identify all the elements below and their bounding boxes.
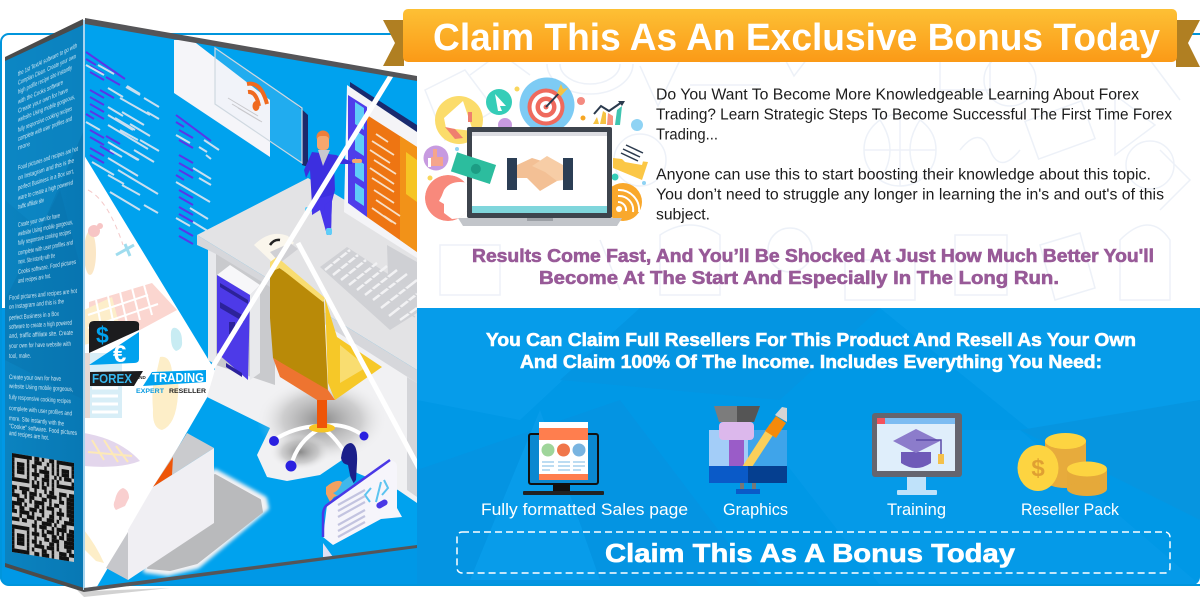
chair [269, 257, 382, 472]
illustration: marketing laptop with handshake [424, 78, 648, 226]
icon: purple dot [498, 118, 512, 132]
desk left leg [208, 250, 216, 365]
icon: thumbs up [424, 146, 448, 170]
dress [333, 476, 357, 499]
intro text: You don’t need to struggle any longer in learning the in's and out's of this [656, 186, 1164, 204]
purple statement: Results Come Fast, And You’ll Be Shocked At Just How Much Better You'll [472, 246, 1154, 266]
X strokes [212, 74, 420, 470]
monitor [344, 82, 417, 293]
logo wordmark: FOREX [92, 372, 133, 386]
logo wordmark: AND [136, 375, 146, 380]
back panel with wifi [174, 40, 308, 167]
side panel text: with the Cooks software [17, 79, 63, 106]
box floor shadow [146, 472, 266, 573]
intro text: subject. [656, 206, 710, 224]
icon: wifi circle [604, 183, 642, 221]
ribbon left tail [383, 20, 404, 66]
ribbon right tail [1176, 20, 1200, 67]
item: reseller pack [1018, 433, 1119, 519]
chair shadow [259, 386, 375, 454]
side panel text: on Instagram and this is the [9, 298, 64, 311]
icon: monitor with graduation cap [872, 413, 962, 495]
box edges [83, 18, 417, 592]
dashed frame [457, 532, 1170, 573]
pink grid [89, 283, 177, 331]
side panel text: software to create a high powered [9, 320, 72, 331]
icon: target [520, 78, 574, 132]
label: Reseller Pack [1021, 500, 1119, 519]
icon: pink dot [577, 97, 585, 105]
code lines [86, 52, 219, 244]
character: man [304, 130, 362, 235]
intro text: Anyone can use this to start boosting their knowledge about this topic. [656, 166, 1151, 184]
label: Graphics [723, 500, 788, 519]
side panel text: and, traffic affiliate site. Create [9, 330, 73, 340]
side panel text: Cooks software. Food pictures [18, 259, 76, 276]
computer tower [217, 265, 260, 295]
side panel text: complete with user profiles and [18, 239, 73, 257]
side panel text: perfect Business in a Box [9, 311, 60, 322]
white box on floor [106, 433, 266, 580]
icon: cursor [486, 89, 512, 115]
call to action [457, 532, 1170, 573]
laptop [458, 127, 622, 226]
keyboard [320, 247, 417, 330]
yellow shape [84, 530, 104, 563]
side panel text: website Using mobile gorgeous, [17, 94, 75, 124]
side panel text [8, 42, 78, 442]
icon: envelope [613, 143, 648, 180]
ribbon main band [403, 9, 1177, 62]
panel: blue lower section [0, 308, 1200, 585]
title: Claim This As An Exclusive Bonus Today [433, 17, 1160, 59]
logo wordmark [90, 370, 206, 395]
box shadow [74, 587, 170, 597]
icon: megaphone [435, 96, 483, 144]
side panel text: fully responsive cooking recipes [18, 229, 71, 247]
logo: forex and trading [89, 321, 206, 395]
purple leaf [84, 433, 140, 467]
speech bubble [323, 460, 402, 545]
icon: small dot [642, 181, 646, 185]
side panel text: Create your own for have [18, 87, 68, 115]
side panel text: complete with user profiles and [9, 405, 72, 418]
side panel text: the 1st TextAI software to go with [18, 42, 77, 78]
icon: dots [428, 147, 459, 180]
icon: blue dot [631, 119, 643, 131]
icon: yellow dot [514, 86, 520, 92]
resellers heading: You Can Claim Full Resellers For This Product And Resell As Your Own [486, 330, 1136, 350]
box front panel [84, 18, 420, 590]
icon: wifi dot [252, 101, 260, 111]
icon: teal dot [612, 174, 618, 180]
product box [5, 18, 420, 597]
side panel text: fully responsive cooking recipes [18, 105, 72, 134]
icon: euro tile: € [113, 341, 126, 368]
chair seat [325, 298, 382, 400]
skin [326, 480, 342, 502]
pink cloud [114, 488, 129, 510]
ribbon banner [383, 9, 1200, 67]
yellow cloud [152, 357, 178, 430]
icon: brushes in jar [709, 406, 787, 494]
side panel text: perfect Business in a Box sort, [18, 168, 74, 192]
side panel text: Create your own for have [9, 374, 61, 383]
side panel text: Food pictures and recipes are hot [9, 288, 77, 302]
icon: head [425, 175, 467, 221]
side panel text: Food pictures and recipes are hot [18, 146, 78, 172]
intro text [656, 86, 1172, 224]
label: Fully formatted Sales page [481, 500, 688, 519]
right desk leg [407, 377, 417, 497]
side panel text: high profile recipe site instantly [18, 64, 72, 96]
item: training [872, 413, 962, 519]
side panel text: complete with user profiles and [18, 115, 72, 143]
side panel text: Create your own for have [18, 212, 60, 229]
side panel text: ware to create a high powered [17, 179, 73, 202]
purple statement [472, 246, 1154, 288]
faint doodle background [425, 50, 1190, 300]
purple statement: Become At The Start And Especially In The Long Run. [539, 268, 1059, 288]
white triangle with pale doodles [84, 155, 219, 590]
label: Training [887, 500, 946, 519]
logo wordmark: TRADING [152, 371, 204, 385]
side panel text: tool, make. [9, 353, 31, 360]
item: graphics [709, 406, 788, 519]
box side panel [5, 19, 84, 592]
side panel text: more. Site instantly with the [18, 252, 55, 266]
icon: gold coins: $ [1031, 455, 1045, 482]
base shadow [276, 440, 324, 466]
blue cloud [171, 328, 182, 351]
icon: handshake [507, 156, 573, 191]
icon: dollar tile: $ [96, 322, 109, 348]
side panel text: more [18, 141, 30, 152]
item: sales page [481, 422, 688, 519]
icon: orange dot [580, 116, 586, 120]
side panel text: more. Site instantly with the [9, 415, 64, 428]
character: woman with speech bubble [323, 443, 402, 557]
resellers heading: And Claim 100% Of The Income. Includes Everything You Need: [520, 352, 1102, 372]
hair [341, 443, 357, 485]
chair base [276, 423, 362, 462]
logo wordmark: EXPERT [136, 388, 164, 395]
side panel text: and recipes are hot. [9, 430, 49, 442]
side panel text: and recipes are hot. [18, 273, 51, 285]
icon: wifi [247, 84, 267, 106]
icon: money [451, 152, 496, 184]
intro text: Trading? Learn Strategic Steps To Become Successful The First Time Forex [656, 106, 1172, 124]
side panel text: on Instagram and this is the [18, 157, 74, 182]
side panel text: website Using mobile gorgeous, [17, 219, 73, 238]
side panel text: website Using mobile gorgeous, [8, 383, 73, 393]
side panel text: fully responsive cooking recipes [9, 394, 71, 405]
intro text: Trading... [656, 126, 718, 144]
side panel text: Complan Clean. Create your own [18, 53, 76, 87]
floor white area under desk [207, 250, 417, 503]
QR code [12, 453, 74, 562]
intro text: Do You Want To Become More Knowledgeable Learning About Forex [656, 86, 1139, 104]
building [90, 353, 122, 418]
chair back [270, 267, 328, 392]
side panel text: "Cookie" software. Food pictures [9, 423, 78, 437]
mouse [254, 234, 298, 263]
side panel text: your own for have website with [9, 341, 71, 350]
icon: monitor with sales page [523, 422, 604, 495]
resellers heading [486, 330, 1136, 372]
side panel text: traffic affiliate site [18, 197, 44, 211]
icon: chart [593, 101, 625, 125]
desk [197, 178, 417, 385]
blue faceted background [1196, 582, 1198, 584]
button text: Claim This As A Bonus Today [605, 538, 1016, 568]
logo wordmark: RESELLER [169, 388, 206, 395]
